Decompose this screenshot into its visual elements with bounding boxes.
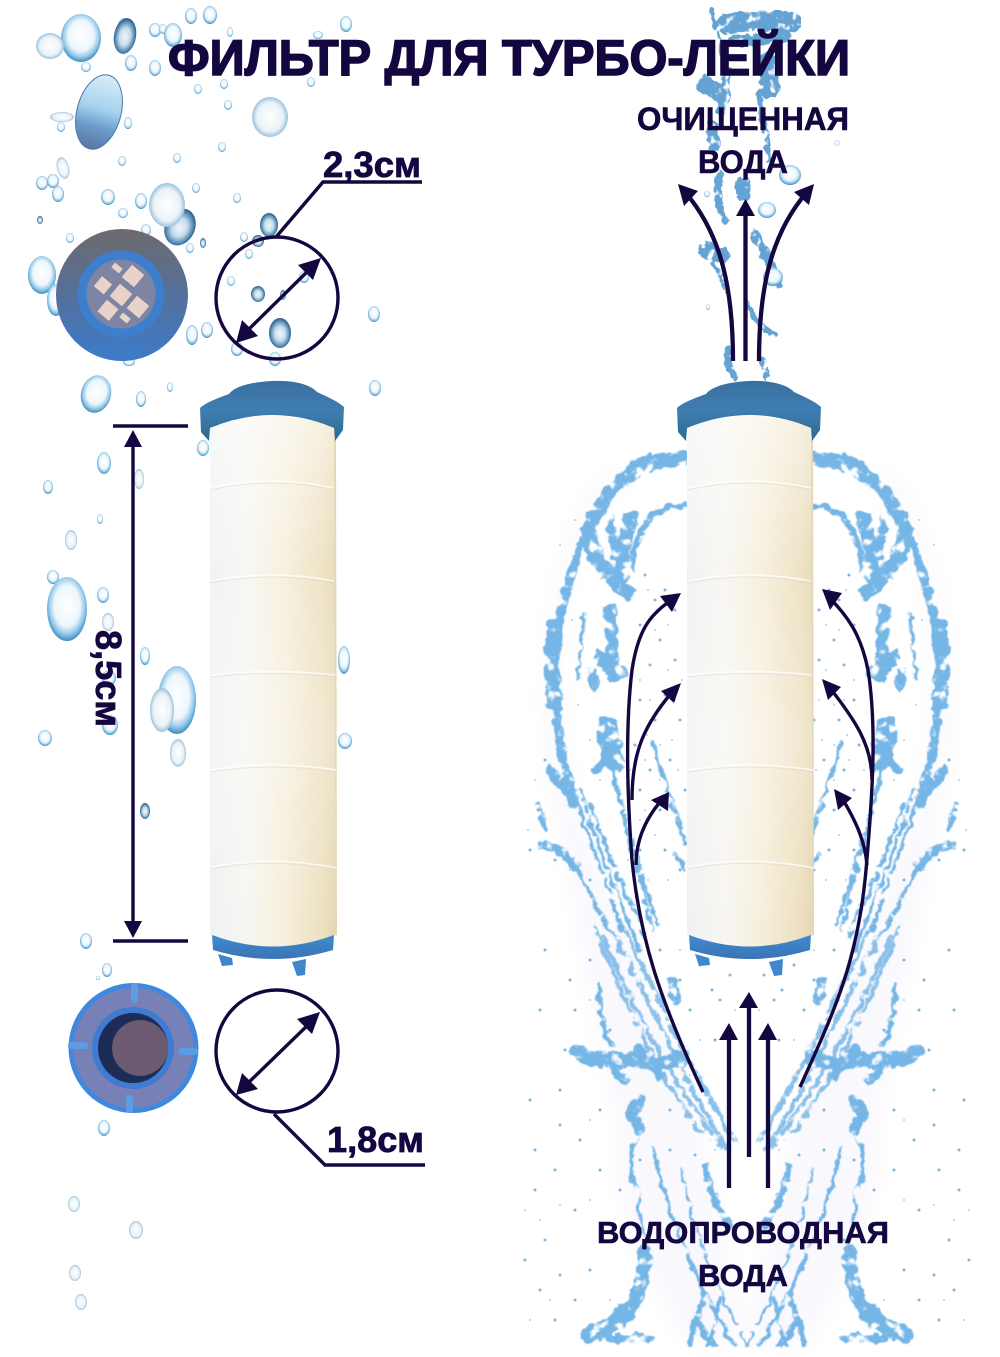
label: purified water: ОЧИЩЕННАЯ: [637, 101, 849, 137]
dimension: 2,3 cm: [216, 144, 422, 359]
dimension: 8,5 cm: [88, 426, 188, 941]
dimension: 1,8 cm: 1,8см: [327, 1119, 424, 1160]
water splash illustration: [525, 452, 969, 1345]
filter cartridge: right: [677, 381, 821, 976]
filter cartridge: left: [200, 381, 344, 976]
dimension: 2,3 cm: 2,3см: [323, 144, 421, 185]
centre inflow arrows: [719, 992, 777, 1188]
side inflow arrows: left: [628, 593, 703, 1092]
label: tap water: ВОДОПРОВОДНАЯ: [597, 1215, 889, 1250]
bubbles: [28, 6, 381, 1310]
label: purified water: ВОДА: [698, 144, 788, 180]
title: ФИЛЬТР ДЛЯ ТУРБО-ЛЕЙКИ: [168, 29, 850, 86]
label: tap water: [597, 1215, 889, 1293]
outflow arrows: [678, 184, 814, 361]
dimension: 1,8 cm: [216, 990, 425, 1165]
photo: filter bottom view: [68, 983, 198, 1113]
dimension: 8,5 cm: 8,5см: [88, 630, 129, 727]
label: purified water: [637, 101, 849, 180]
label: tap water: ВОДА: [698, 1258, 788, 1293]
side inflow arrows: right: [800, 589, 873, 1087]
photo: filter top view: [56, 229, 188, 361]
water jet above filter: [704, 8, 840, 378]
